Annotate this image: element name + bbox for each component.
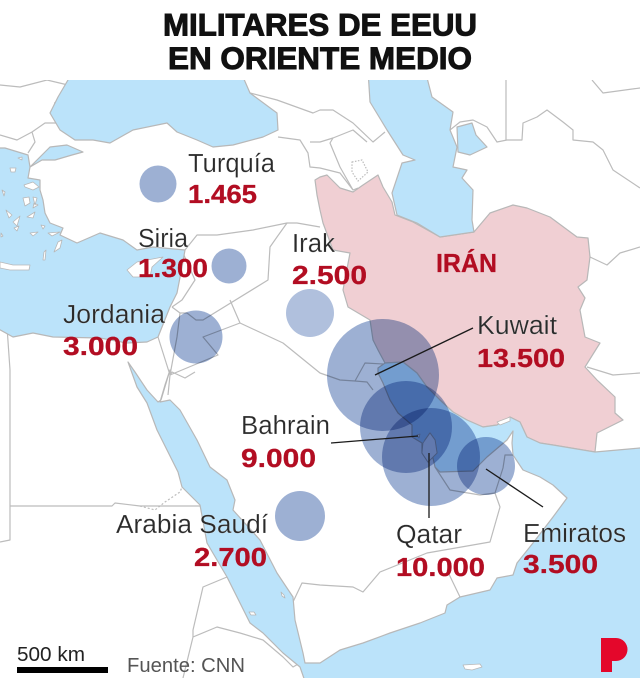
label: Kuwait: [477, 312, 565, 373]
label: Kuwait: 13.500: [477, 343, 565, 373]
circle: Qatar: [382, 408, 480, 506]
panel: Qatar peninsula: [422, 433, 437, 462]
label: Jordania: [63, 301, 166, 361]
label: Irak: [292, 230, 367, 290]
label: Irán: IRÁN: [436, 248, 497, 278]
label: Siria: Siria: [138, 225, 189, 253]
label: Bahrain: 9.000: [241, 443, 316, 473]
scale bar: [17, 644, 108, 673]
leader line: Emiratos: [486, 469, 543, 507]
label: Bahrain: Bahrain: [241, 412, 330, 440]
scale bar: 500 km: [17, 644, 85, 666]
panel: Kara-Bogaz: [457, 123, 487, 155]
label: Turquía: 1.465: [188, 179, 257, 209]
label: Turquía: [188, 150, 276, 209]
label: Jordania: Jordania: [63, 301, 166, 329]
panel: Mediterranean Sea: [0, 148, 185, 343]
label: Arabia Saudí: Arabia Saudí: [116, 511, 268, 539]
source: Fuente: CNN: [127, 655, 245, 677]
circle: Jordania: [170, 310, 222, 364]
label: Bahrain: [241, 412, 330, 473]
label: Siria: 1.300: [138, 253, 208, 283]
label: Qatar: [396, 521, 485, 582]
label: Qatar: Qatar: [396, 521, 463, 549]
label: Emiratos: 3.500: [523, 549, 598, 579]
circle: Arabia Saudí: [275, 491, 325, 541]
label: Arabia Saudí: 2.700: [194, 542, 267, 572]
panel: Black Sea: [50, 70, 278, 147]
circle: Siria: [212, 248, 246, 284]
label: Emiratos: Emiratos: [523, 520, 626, 548]
label: Emiratos: [523, 520, 626, 579]
title: MILITARES DE EEUU: [163, 6, 477, 42]
panel: Red Sea, Persian Gulf and Arabian Sea: [128, 362, 640, 678]
panel: more islands: [249, 417, 510, 670]
circle: Turquía: [140, 166, 176, 202]
label: Kuwait: Kuwait: [477, 312, 557, 340]
title: [163, 6, 477, 76]
label: Irak: 2.500: [292, 260, 367, 290]
circle: Kuwait: [327, 319, 439, 431]
panel: Sea of Marmara: [30, 145, 83, 167]
label: Jordania: 3.000: [63, 331, 138, 361]
label: Arabia Saudí: [116, 511, 268, 572]
panel: Iran: [315, 175, 623, 452]
icon: publisher logo: [601, 638, 628, 672]
circle: Emiratos: [457, 437, 515, 495]
label: Siria: [138, 225, 208, 283]
label: Qatar: 10.000: [396, 552, 485, 582]
panel: Caspian Sea: [368, 70, 474, 237]
leader line: Qatar: [428, 453, 430, 518]
title: EN ORIENTE MEDIO: [168, 40, 472, 76]
leader line: Kuwait: [375, 328, 473, 375]
label: Irak: Irak: [292, 230, 335, 258]
leader line: Bahrain: [331, 436, 418, 443]
panel: islands: [0, 157, 163, 277]
label: Turquía: Turquía: [188, 150, 276, 178]
circle: Irak: [286, 289, 334, 337]
circle: Bahrain: [360, 381, 452, 473]
